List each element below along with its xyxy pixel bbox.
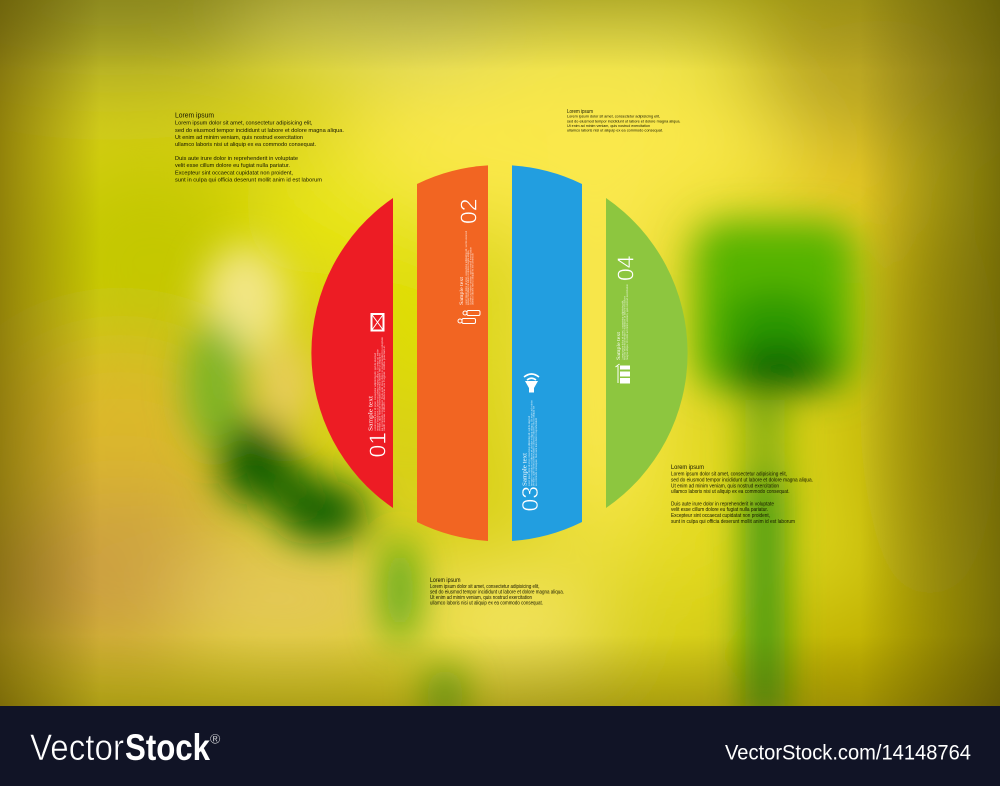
segment 01: red (311, 198, 393, 508)
watermark bar (0, 706, 1000, 786)
sample text 03: Sample text (522, 453, 528, 486)
description 03: tempor incididunt ut labore et dolore magna aliqua. Ut enim ad minim (529, 400, 533, 486)
segment 02: orange (417, 165, 488, 541)
text block: bottom right: Lorem ipsum dolor sit amet, consectetur adipisicing elit, (671, 472, 787, 478)
text block: bottom right: velit esse cillum dolore eu fugiat nulla pariatur. (671, 507, 768, 513)
icon: bar chart (616, 364, 630, 384)
number 03: 03 (517, 486, 543, 512)
description 04 (620, 283, 629, 360)
logo: VectorStock: Vector (30, 727, 124, 768)
sample text 04: Sample text (616, 331, 622, 360)
text block: top left: sunt in culpa qui officia deserunt mollit anim id est laborum (175, 178, 322, 184)
heading: Lorem ipsum (567, 109, 593, 115)
text block: bottom center: sed do eiusmod tempor incididunt ut labore et dolore magna aliqua. (430, 590, 564, 596)
text block: top left: velit esse cillum dolore eu fugiat nulla pariatur. (175, 163, 290, 169)
heading: Lorem ipsum (430, 577, 460, 584)
text block: bottom right: sed do eiusmod tempor incididunt ut labore et dolore magna aliqua. (671, 478, 813, 484)
description 03: veniam, quis nostrud exercitation ullamco laboris nisi ut aliquip ex (532, 405, 536, 486)
description 02: tempor incididunt ut labore et dolore magna aliqua. (466, 250, 470, 305)
text block: bottom right: Duis aute irure dolor in reprehenderit in voluptate (671, 502, 774, 508)
label 01 (364, 314, 390, 458)
description 03: ea commodo consequat. Duis aute irure dolor in reprehenderit (534, 418, 538, 486)
text block: top left: ullamco laboris nisi ut aliquip ex ea commodo consequat. (175, 142, 316, 148)
icon: speaker with signal (524, 374, 539, 392)
description 04: magna aliqua. Ut enim ad minim veniam, quis nostrud exercitation (625, 283, 629, 360)
sample text 01: Sample text (368, 396, 374, 431)
description 02 (464, 231, 475, 305)
description 01: velit esse cillum dolore eu fugiat nulla pariatur. (382, 345, 386, 431)
number 01: 01 (364, 432, 390, 458)
icon: envelope (372, 314, 384, 330)
description 04: sed do eiusmod tempor incididunt ut labore et dolore (623, 295, 627, 360)
text block: bottom right: sunt in culpa qui officia deserunt mollit anim id est laborum (671, 519, 795, 525)
text block: top center: ullamco laboris nisi ut aliquip ex ea commodo consequat. (567, 128, 663, 132)
heading: Lorem ipsum (175, 110, 214, 120)
text block: top center: sed do eiusmod tempor incididunt ut labore et dolore magna aliqua. (567, 118, 680, 124)
number 04: 04 (612, 255, 638, 281)
text block: bottom right (671, 464, 813, 525)
label 02 (456, 198, 482, 324)
text block: top left: Excepteur sint occaecat cupidatat non proident, (175, 170, 293, 176)
text block: bottom right: Ut enim ad minim veniam, quis nostrud exercitation (671, 484, 779, 490)
text block: bottom center: Ut enim ad minim veniam, quis nostrud exercitation (430, 595, 532, 601)
text block: top center: Ut enim ad minim veniam, quis nostrud exercitation (567, 123, 650, 128)
number 02: 02 (456, 198, 482, 224)
text block: top left: Lorem ipsum dolor sit amet, consectetur adipisicing elit, (175, 120, 313, 126)
description 02: Lorem ipsum dolor sit amet, consectetur adipisicing elit, sed do eiusmod (464, 231, 468, 305)
text block: top center: Lorem ipsum dolor sit amet, consectetur adipisicing elit, (567, 114, 660, 118)
text block: top left (175, 110, 344, 184)
text block: bottom center (430, 577, 564, 606)
text block: top left: Ut enim ad minim veniam, quis nostrud exercitation (175, 135, 303, 141)
segment 04: green (606, 198, 688, 508)
segment 03: blue (512, 165, 582, 541)
text block: bottom right: ullamco laboris nisi ut aliquip ex ea commodo consequat. (671, 489, 790, 495)
icon: two people (458, 310, 480, 324)
description 03: Lorem ipsum dolor sit amet, consectetur adipisicing elit, sed do eiusmod (527, 416, 531, 486)
logo: VectorStock: Stock (125, 727, 210, 768)
description 01: Lorem ipsum dolor sit amet, consectetur adipisicing elit, sed do eiusmod (373, 352, 377, 431)
logo: VectorStock (30, 727, 221, 768)
text block: top left: Duis aute irure dolor in reprehenderit in voluptate (175, 156, 298, 162)
text block: top left: sed do eiusmod tempor incididunt ut labore et dolore magna aliqua. (175, 128, 344, 134)
label 03 (517, 374, 543, 512)
description 02: ullamco laboris nisi ut aliquip ex ea commodo (471, 252, 475, 305)
text block: bottom center: Lorem ipsum dolor sit amet, consectetur adipisicing elit, (430, 584, 540, 590)
sample text 02: Sample text (459, 276, 465, 305)
image id: VectorStock.com/14148764 (725, 742, 971, 764)
text block: bottom center: ullamco laboris nisi ut aliquip ex ea commodo consequat. (430, 600, 543, 606)
heading: Lorem ipsum (671, 464, 704, 471)
label 04 (612, 255, 638, 384)
description 01: veniam, quis nostrud exercitation ullamco laboris nisi ut aliquip ex (378, 352, 382, 431)
text block: bottom right: Excepteur sint occaecat cupidatat non proident, (671, 513, 770, 519)
logo: VectorStock: ® (210, 730, 221, 746)
description 03 (527, 400, 538, 486)
description 04: Lorem ipsum dolor sit amet, consectetur adipisicing elit, (620, 300, 624, 360)
text block: top center (567, 109, 680, 132)
description 02: Ut enim ad minim veniam, quis nostrud exercitation (468, 246, 472, 305)
description 01 (373, 336, 386, 431)
circle segments (311, 165, 688, 541)
description 01: ea commodo consequat. Duis aute irure dolor in reprehenderit in voluptate (380, 336, 384, 431)
description 01: tempor incididunt ut labore et dolore magna aliqua. Ut enim ad minim (375, 349, 379, 431)
